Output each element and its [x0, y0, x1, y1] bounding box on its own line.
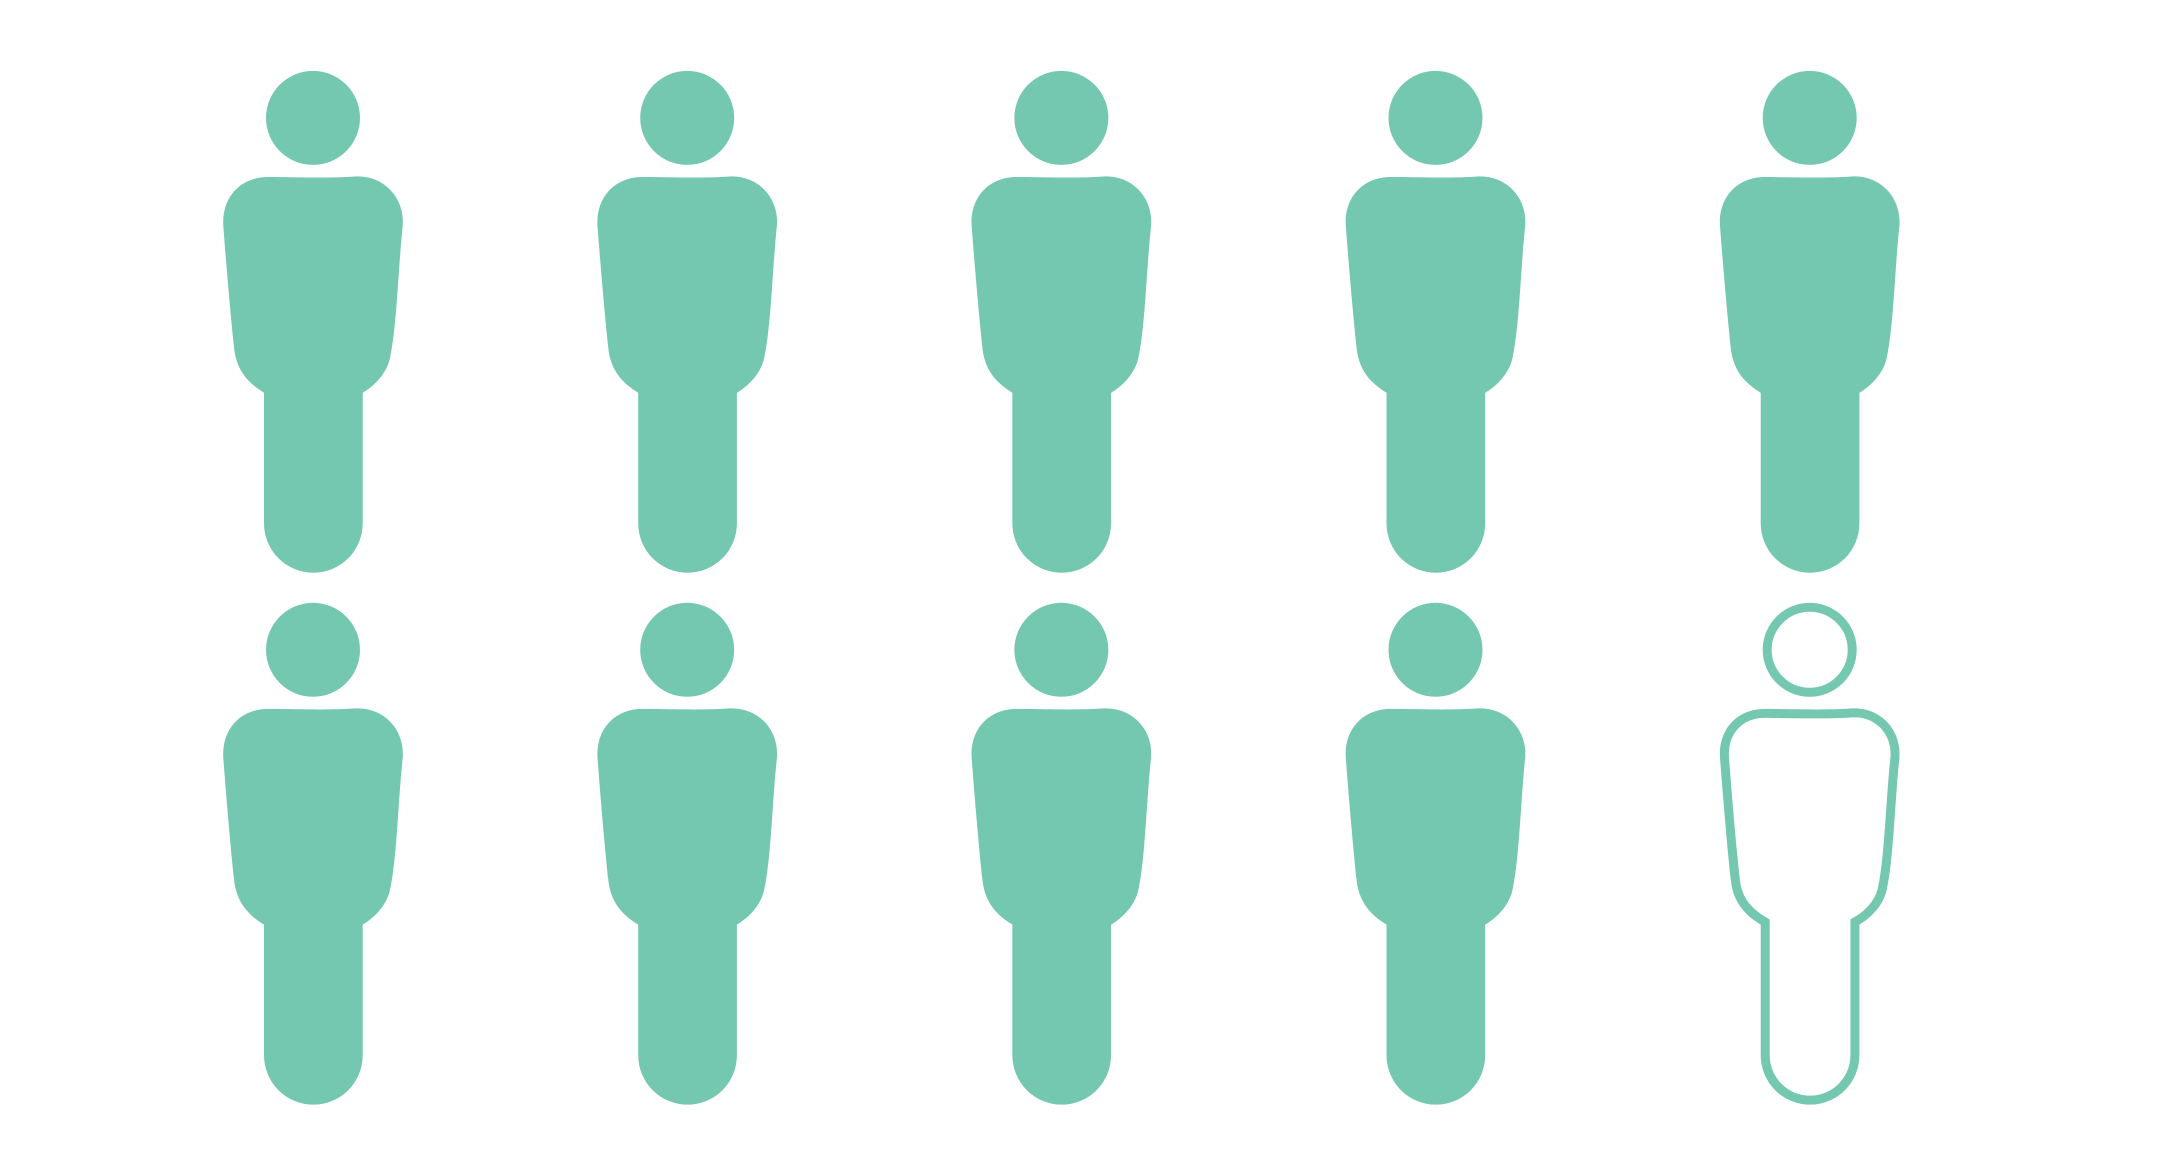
- icon: filled person row 1 column 3: [972, 71, 1151, 573]
- icon: filled person row 2 column 3: [972, 603, 1151, 1105]
- pictogram: 10 person icons, 9 filled and 1 outlined: [223, 70, 1900, 1105]
- icon: filled person row 2 column 4: [1346, 603, 1525, 1105]
- icon: outlined person row 2 column 5: [1720, 607, 1900, 1105]
- icon: filled person row 1 column 1: [223, 71, 403, 573]
- icon: filled person row 2 column 2: [597, 603, 777, 1105]
- icon: filled person row 1 column 5: [1720, 71, 1900, 573]
- icon: filled person row 1 column 2: [597, 71, 777, 573]
- icon: filled person row 2 column 1: [223, 603, 403, 1105]
- icon: filled person row 1 column 4: [1346, 71, 1525, 573]
